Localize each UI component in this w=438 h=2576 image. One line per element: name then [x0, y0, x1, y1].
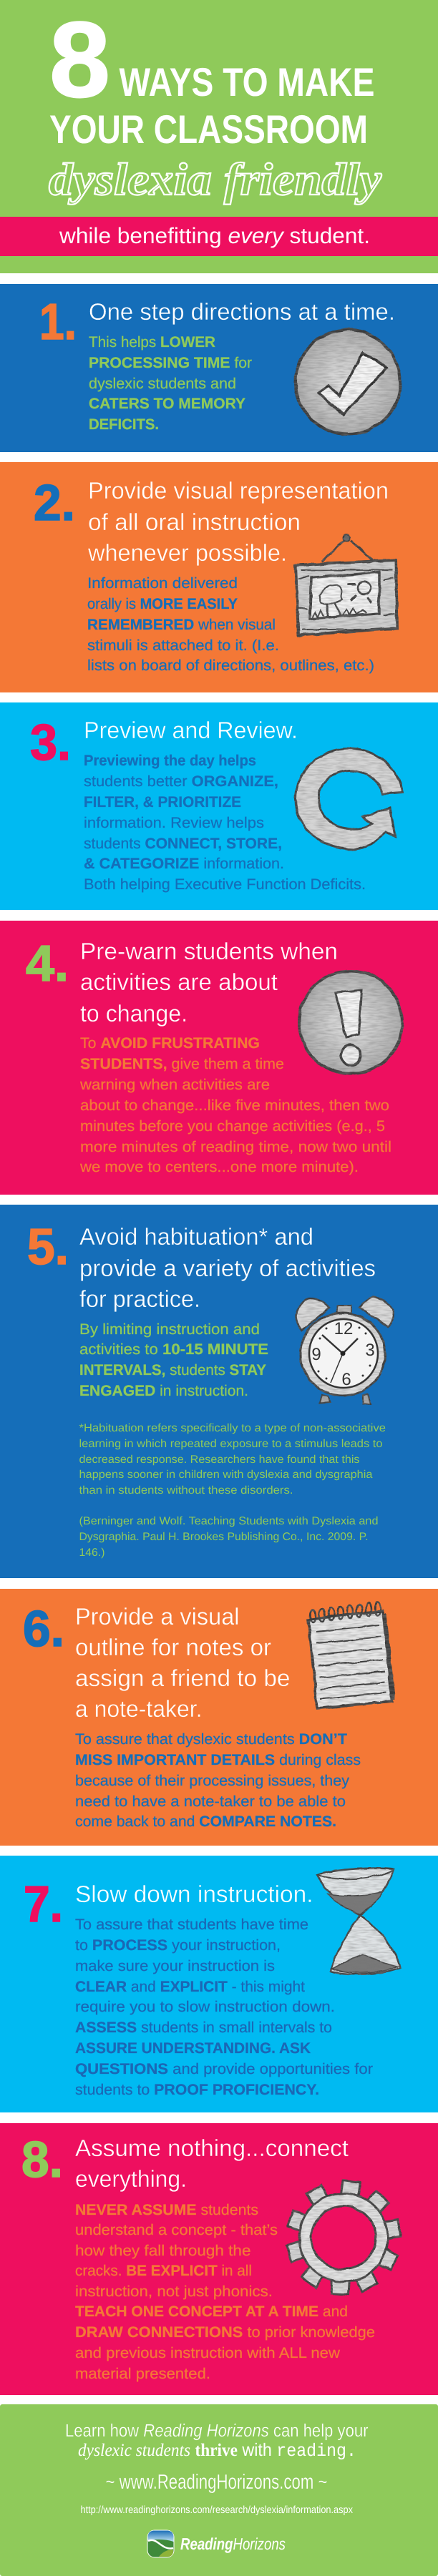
title line: dyslexia friendly script: dyslexia friendly: [49, 154, 382, 205]
heading 4: activities are about: [80, 969, 278, 995]
body text 4: STUDENTS, give them a time: [80, 1056, 284, 1072]
body text 7: ASSESS students in small intervals to: [75, 2019, 332, 2036]
body text 7: to PROCESS your instruction,: [75, 1937, 281, 1954]
body text 3: information. Review helps: [84, 815, 264, 831]
body text 5: ENGAGED in instruction.: [79, 1383, 248, 1399]
icon: framed picture: [296, 535, 397, 635]
heading 5: Avoid habituation* and: [79, 1223, 313, 1250]
heading 2: Provide visual representation: [88, 477, 389, 504]
heading 2: whenever possible.: [87, 539, 287, 566]
body text 6: need to have a note-taker to be able to: [75, 1793, 346, 1810]
panel: step 3: [0, 702, 438, 910]
body text 1: PROCESSING TIME for: [89, 355, 252, 371]
body text 8: how they fall through the: [75, 2243, 250, 2259]
panel: step 1: [0, 284, 438, 452]
icon: alarm clock: 3: [365, 1341, 375, 1360]
heading 5: provide a variety of activities: [79, 1255, 376, 1281]
footer line: learn how: Learn how Reading Horizons can help your: [65, 2421, 368, 2441]
body text 3: Previewing the day helps: [84, 753, 256, 769]
subtitle band: [0, 217, 438, 256]
body text 1: CATERS TO MEMORY: [89, 396, 245, 412]
heading 4: Pre-warn students when: [80, 938, 338, 964]
body text 1: dyslexic students and: [89, 376, 236, 392]
icon: circular arrow: [296, 748, 402, 849]
heading 2: of all oral instruction: [88, 509, 301, 535]
body text 6: [75, 1731, 361, 1830]
step number 7: 7.: [24, 1876, 63, 1933]
body text 7: ASSURE UNDERSTANDING. ASK: [75, 2040, 311, 2057]
body text 7: [75, 1916, 373, 2098]
footnote on habituation: decreased response. Researchers have found that this: [79, 1454, 360, 1466]
heading 6: [75, 1603, 291, 1722]
icon: exclamation mark: [299, 971, 402, 1074]
heading 8: Assume nothing...connect: [75, 2135, 349, 2161]
body text 6: come back to and COMPARE NOTES.: [75, 1813, 336, 1830]
body text 6: because of their processing issues, they: [75, 1773, 350, 1789]
body text 3: students CONNECT, STORE,: [84, 836, 282, 852]
heading 7: Slow down instruction.: [75, 1881, 313, 1907]
body text 3: FILTER, & PRIORITIZE: [84, 794, 241, 810]
citation: [79, 1515, 378, 1559]
body text 8: instruction, not just phonics.: [75, 2283, 273, 2300]
body text 1: This helps LOWER: [89, 334, 215, 351]
footnote on habituation: *Habituation refers specifically to a type of non-associative: [79, 1422, 386, 1434]
body text 7: require you to slow instruction down.: [75, 1999, 335, 2015]
panel: step 6: [0, 1589, 438, 1846]
body text 2: orally is MORE EASILY: [87, 596, 238, 612]
body text 7: QUESTIONS and provide opportunities for: [75, 2061, 373, 2077]
body text 8: DRAW CONNECTIONS to prior knowledge: [75, 2324, 375, 2341]
footnote on habituation: than in students without these disorders.: [79, 1484, 293, 1497]
subtitle band: while benefitting every student.: [59, 223, 370, 248]
footer website: ~ www.ReadingHorizons.com ~: [106, 2471, 328, 2494]
panel: footer: [0, 2404, 438, 2576]
panel: step 2: [0, 462, 438, 692]
panel: step 5: [0, 1205, 438, 1578]
body text 8: and previous instruction with ALL new: [75, 2345, 341, 2361]
icon: notepad: [308, 1602, 394, 1708]
body text 1: [89, 334, 252, 433]
body text 3: Both helping Executive Function Deficits.: [84, 876, 366, 893]
body text 6: MISS IMPORTANT DETAILS during class: [75, 1752, 361, 1768]
body text 4: [79, 1035, 391, 1175]
body text 5: [79, 1321, 268, 1399]
heading 8: [75, 2135, 349, 2192]
body text 7: students to PROOF PROFICIENCY.: [75, 2082, 319, 2098]
heading 4: [80, 938, 338, 1027]
heading 8: everything.: [75, 2165, 187, 2192]
body text 1: DEFICITS.: [89, 416, 159, 433]
icon: alarm clock: 6: [341, 1370, 351, 1389]
body text 2: [87, 575, 374, 674]
body text 3: students better ORGANIZE,: [84, 773, 278, 790]
body text 4: more minutes of reading time, now two until: [80, 1139, 391, 1155]
body text 5: INTERVALS, students STAY: [79, 1362, 266, 1378]
footnote on habituation: learning in which repeated exposure to a stimulus leads to: [79, 1438, 382, 1450]
heading 6: outline for notes or: [75, 1634, 271, 1660]
panel: step 4: [0, 921, 438, 1195]
step number 4: 4.: [26, 936, 69, 992]
logo: Reading Horizons: [147, 2530, 286, 2557]
title line: ways to make: WAYS TO MAKE: [119, 59, 375, 104]
panel: step 7: [0, 1856, 438, 2112]
icon: check mark: [296, 330, 400, 434]
step number 6: 6.: [23, 1601, 64, 1657]
logo: Reading Horizons: ReadingHorizons: [180, 2535, 286, 2553]
body text 2: stimuli is attached to it. (I.e.: [87, 637, 279, 654]
icon: alarm clock: 9: [311, 1345, 321, 1364]
body text 4: about to change...like five minutes, then two: [80, 1097, 389, 1114]
footnote on habituation: [79, 1422, 386, 1497]
step number 1: 1.: [39, 294, 77, 351]
body text 2: REMEMBERED when visual: [87, 617, 276, 633]
heading 1: One step directions at a time.: [89, 298, 395, 325]
heading 5: for practice.: [79, 1285, 200, 1312]
step number 5: 5.: [27, 1219, 69, 1275]
footer url: http://www.readinghorizons.com/research/dyslexia/information.aspx: [80, 2504, 354, 2516]
citation: 146.): [79, 1547, 104, 1559]
body text 3: [84, 753, 366, 893]
body text 7: To assure that students have time: [75, 1916, 308, 1933]
body text 5: By limiting instruction and: [79, 1321, 260, 1338]
step number 2: 2.: [34, 475, 75, 532]
body text 4: minutes before you change activities (e.g., 5: [80, 1118, 385, 1135]
body text 4: we move to centers...one more minute).: [79, 1159, 359, 1175]
icon: alarm clock: [296, 1297, 394, 1404]
body text 7: make sure your instruction is: [75, 1958, 275, 1974]
body text 8: TEACH ONE CONCEPT AT A TIME and: [75, 2303, 348, 2320]
body text 7: CLEAR and EXPLICIT - this might: [75, 1979, 305, 1995]
step number 8: 8.: [21, 2132, 63, 2188]
title line: your classroom: YOUR CLASSROOM: [49, 107, 368, 152]
heading 6: a note-taker.: [75, 1695, 202, 1722]
citation: Dysgraphia. Paul H. Brookes Publishing Co., Inc. 2009. P.: [79, 1531, 368, 1543]
body text 4: To AVOID FRUSTRATING: [80, 1035, 260, 1052]
heading 6: assign a friend to be: [75, 1665, 291, 1691]
citation: (Berninger and Wolf. Teaching Students with Dyslexia and: [79, 1515, 378, 1527]
footer line: dyslexic students thrive: dyslexic students thrive with reading.: [78, 2440, 356, 2462]
heading 6: Provide a visual: [75, 1603, 239, 1630]
panel: header: [0, 0, 438, 273]
body text 8: understand a concept - that’s: [75, 2222, 278, 2238]
body text 6: To assure that dyslexic students DON’T: [75, 1731, 347, 1748]
heading 5: [79, 1223, 376, 1312]
body text 2: lists on board of directions, outlines, etc.): [87, 657, 374, 674]
body text 2: Information delivered: [87, 575, 238, 592]
icon: gear: [287, 2180, 401, 2295]
panel: step 8: [0, 2123, 438, 2395]
body text 8: [75, 2202, 375, 2382]
body text 4: warning when activities are: [79, 1077, 270, 1093]
heading 3: Preview and Review.: [84, 717, 298, 743]
body text 8: NEVER ASSUME students: [75, 2202, 258, 2218]
heading 4: to change.: [80, 1000, 188, 1027]
heading 2: [87, 477, 389, 566]
step number 3: 3.: [30, 715, 71, 771]
body text 8: material presented.: [75, 2366, 210, 2382]
body text 3: & CATEGORIZE information.: [84, 856, 284, 872]
title: big number 8: 8: [49, 0, 110, 119]
icon: alarm clock: 12: [334, 1319, 353, 1338]
icon: hourglass: [317, 1869, 400, 1974]
body text 8: cracks. BE EXPLICIT in all: [75, 2263, 252, 2279]
footnote on habituation: happens sooner in children with dyslexia and dysgraphia: [79, 1469, 373, 1481]
body text 5: activities to 10-15 MINUTE: [79, 1341, 268, 1358]
